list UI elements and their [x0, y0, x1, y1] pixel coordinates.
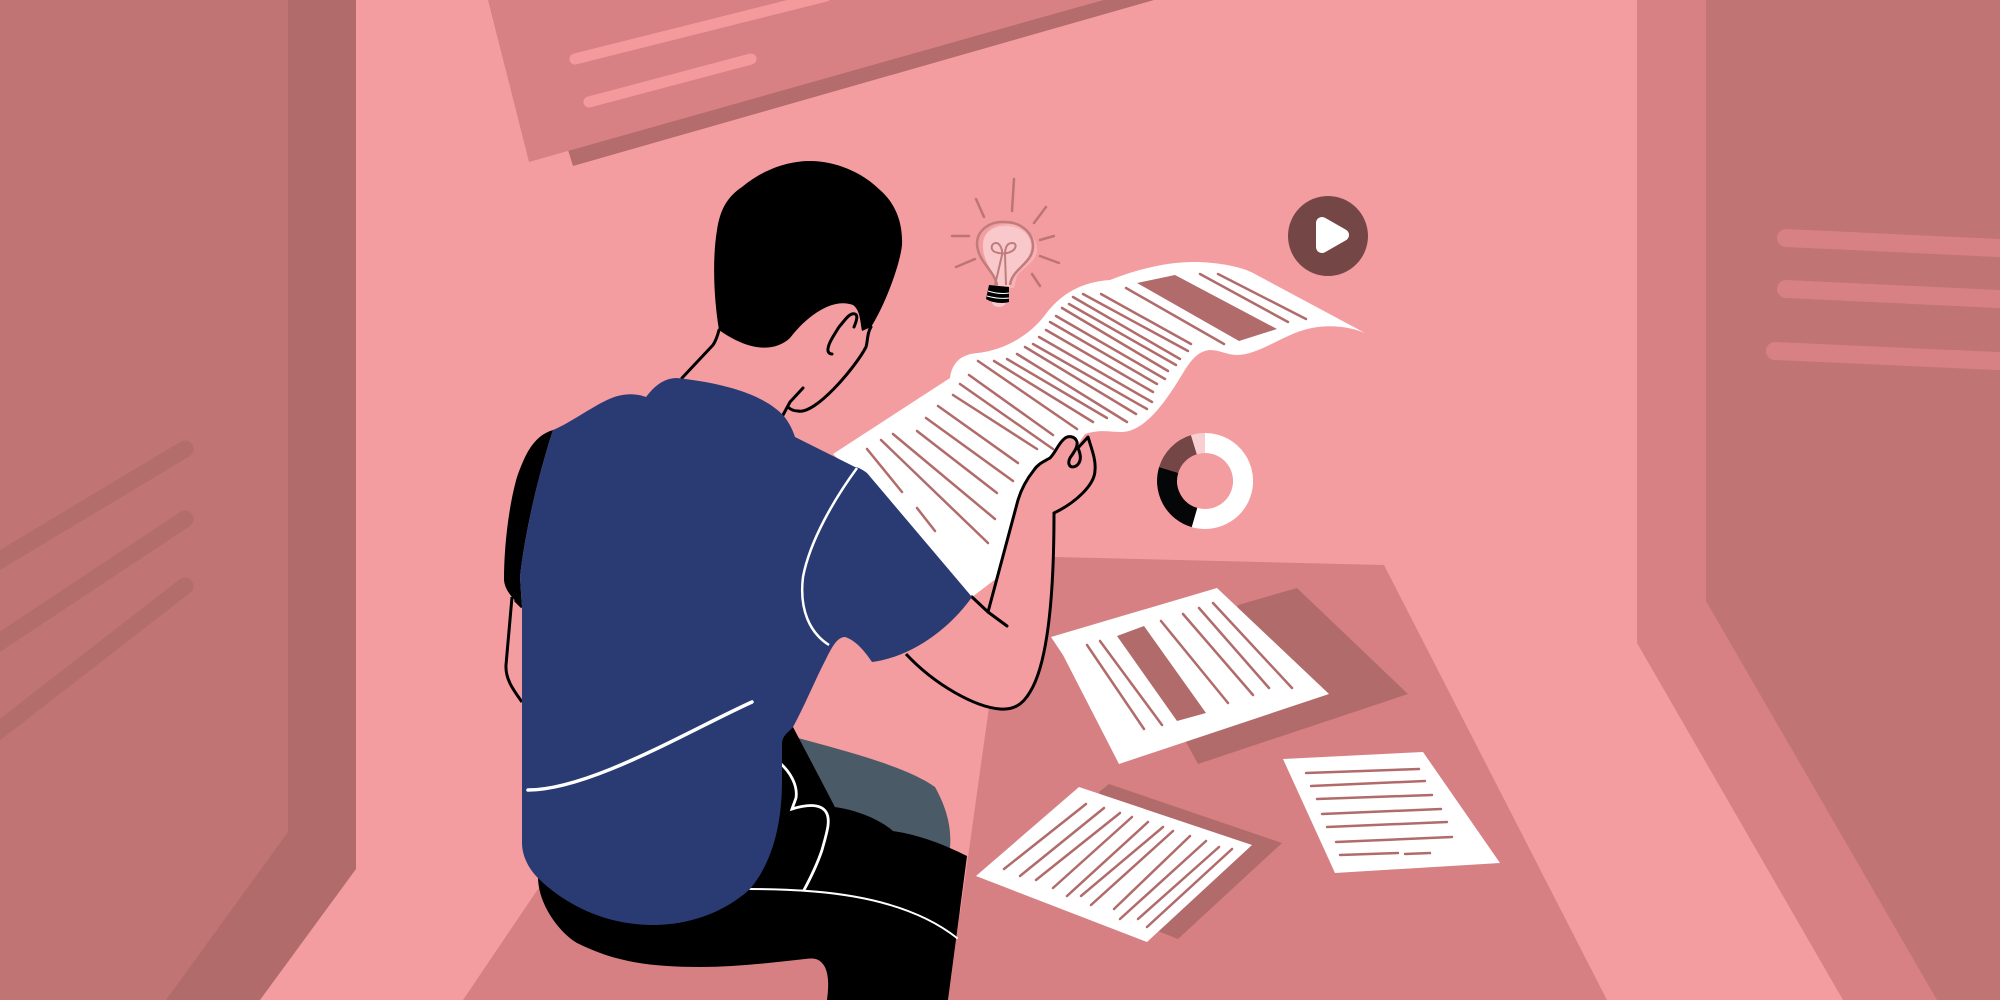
document: large paper on floor	[1051, 588, 1408, 764]
icon: light bulb	[952, 179, 1059, 307]
trousers	[538, 727, 967, 1000]
far arm	[506, 597, 522, 702]
seat	[798, 738, 950, 848]
panel: top board	[488, 0, 1154, 166]
document: right paper on floor	[1283, 752, 1500, 873]
donut chart	[1167, 443, 1243, 519]
document: lower paper on floor	[976, 784, 1282, 942]
head: neck, jaw and ear outlines	[682, 314, 871, 415]
backpack strap	[504, 430, 553, 608]
arm and hand	[906, 436, 1095, 709]
head: hair	[714, 161, 902, 348]
icon: play button	[1288, 196, 1368, 276]
long paper held by the man	[833, 262, 1365, 597]
panel: left wall	[0, 0, 356, 1000]
panel: floor	[463, 557, 1607, 1000]
trouser crease lines	[750, 763, 957, 938]
panel: right wall	[1637, 0, 2000, 1000]
torso: blue t-shirt	[520, 378, 972, 925]
